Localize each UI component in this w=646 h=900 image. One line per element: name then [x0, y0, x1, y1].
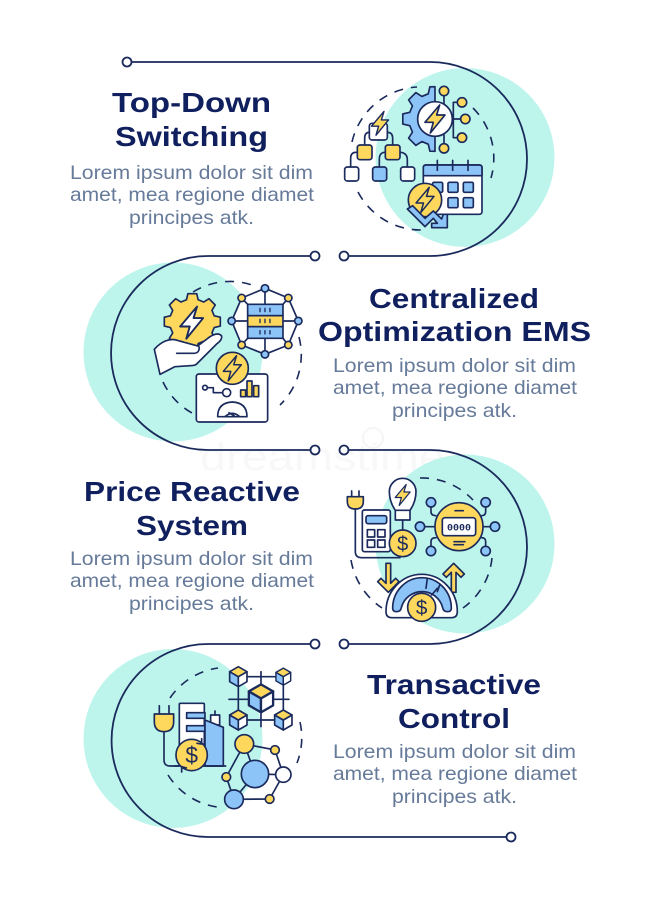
- text block: price reactive description: [70, 548, 315, 615]
- text block: transactive control description: amet, mea regione diamet: [333, 763, 578, 785]
- text block: transactive control description: [333, 741, 578, 808]
- panel: teal backdrop circles: [84, 68, 554, 828]
- text block: top-down switching description: amet, mea regione diamet: [70, 184, 315, 206]
- heading: centralized optimization ems: [318, 283, 591, 347]
- text block: centralized optimization description: amet, mea regione diamet: [333, 377, 578, 399]
- heading: top-down switching: Switching: [115, 121, 268, 152]
- watermark: dreamstime: [200, 437, 445, 479]
- icon: blockchain, building and molecule network: [154, 667, 292, 809]
- heading: transactive control: [367, 669, 541, 734]
- heading: centralized optimization ems: Centralized: [369, 283, 539, 314]
- dollar sign: $: [185, 742, 198, 768]
- heading: top-down switching: [112, 87, 271, 152]
- heading: transactive control: Transactive: [367, 669, 541, 700]
- panel: top-down switching: [70, 86, 494, 230]
- heading: centralized optimization ems: Optimization EMS: [318, 316, 591, 347]
- text block: centralized optimization description: principes atk.: [392, 400, 517, 422]
- dollar sign: $: [416, 597, 428, 620]
- icon: gear, hierarchy and calendar: [345, 86, 482, 228]
- heading: transactive control: Control: [398, 703, 510, 734]
- watermark: [200, 428, 445, 479]
- icon: gear in hand, server network and dashboard: [154, 285, 302, 422]
- heading: price reactive system: Price Reactive: [84, 476, 300, 507]
- heading: price reactive system: System: [136, 510, 248, 541]
- panel: price reactive system: [70, 476, 500, 621]
- text block: centralized optimization description: [333, 355, 578, 422]
- connector line path: [111, 58, 527, 842]
- heading: price reactive system: [84, 476, 300, 541]
- icon: centralized dashed ring: [163, 281, 301, 413]
- icon: transactive dashed ring: [168, 668, 302, 807]
- meter digits: 0000: [447, 523, 471, 534]
- text block: top-down switching description: principes atk.: [129, 207, 254, 229]
- text block: top-down switching description: Lorem ipsum dolor sit dim: [70, 162, 313, 184]
- icon: price reactive dashed ring: [351, 478, 492, 608]
- text block: price reactive description: principes atk.: [129, 593, 254, 615]
- text block: transactive control description: principes atk.: [392, 786, 517, 808]
- panel: centralized optimization ems: [154, 281, 591, 422]
- text block: transactive control description: Lorem ipsum dolor sit dim: [333, 741, 576, 763]
- text block: centralized optimization description: Lorem ipsum dolor sit dim: [333, 355, 576, 377]
- panel: transactive control: [154, 667, 578, 809]
- heading: top-down switching: Top-Down: [112, 87, 271, 118]
- text block: price reactive description: Lorem ipsum dolor sit dim: [70, 548, 313, 570]
- text block: top-down switching description: [70, 162, 315, 229]
- icon: plug, bulb, meter and price gauge: [347, 478, 500, 621]
- text block: price reactive description: amet, mea regione diamet: [70, 570, 315, 592]
- dollar sign: $: [397, 533, 408, 555]
- icon: top-down switching dashed ring: [352, 87, 494, 230]
